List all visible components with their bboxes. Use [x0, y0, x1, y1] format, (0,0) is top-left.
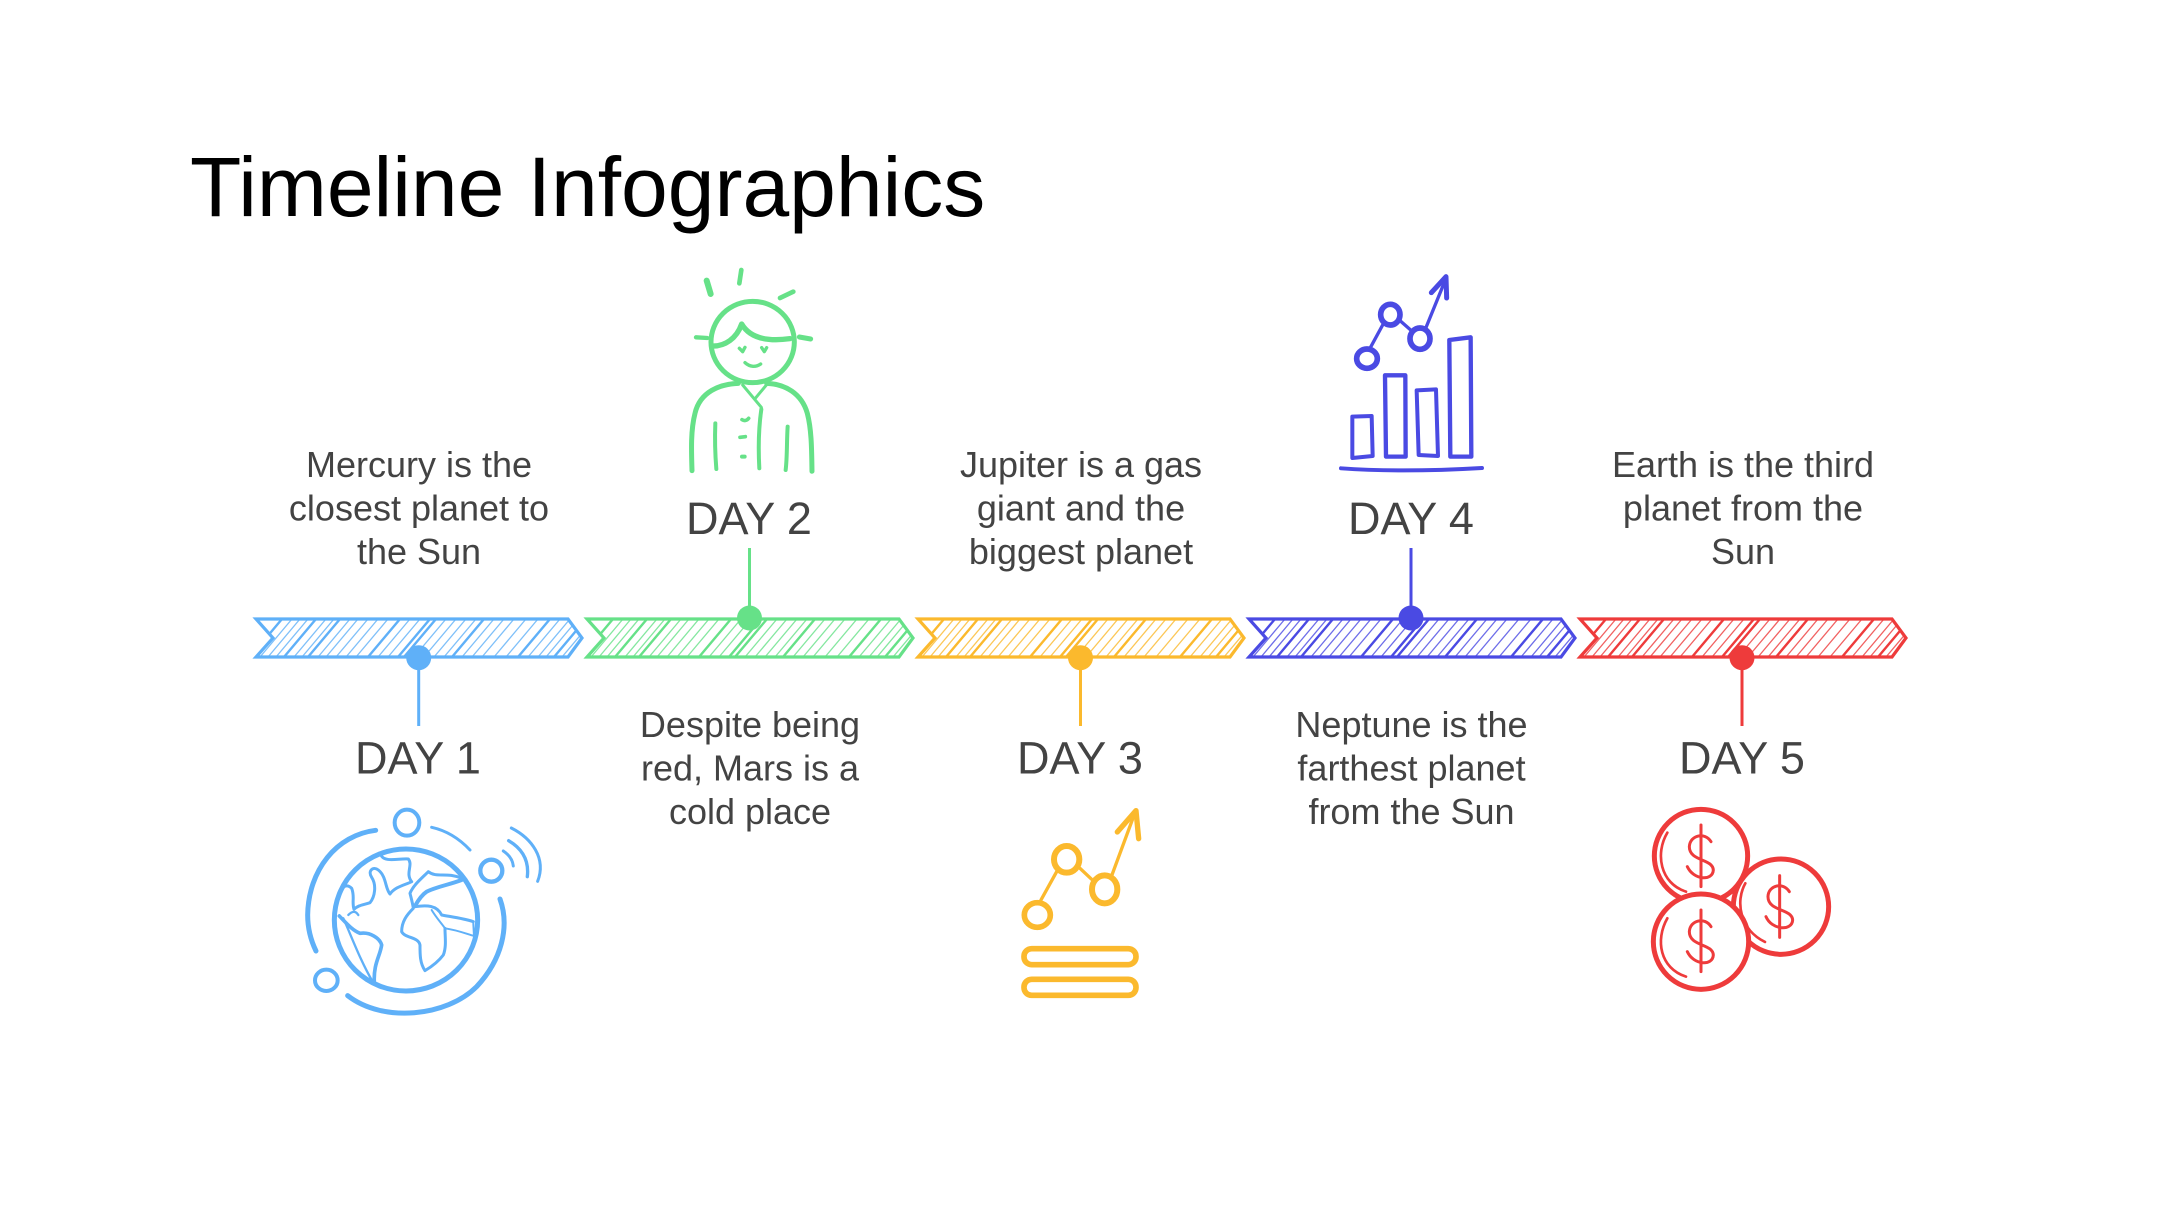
description: day 5: Earth is the third — [1612, 444, 1874, 485]
arrow: day 2 — [581, 619, 925, 657]
icon: globe with orbit — [308, 810, 540, 1013]
label: day 1: DAY 1 — [355, 732, 481, 784]
icon: three dollar coins — [1653, 809, 1829, 989]
description: day 5: planet from the — [1623, 488, 1863, 528]
label: day 4: DAY 4 — [1348, 493, 1474, 544]
description: day 4: Neptune is the — [1295, 704, 1528, 745]
description: day 1: closest planet to — [289, 488, 549, 528]
description: day 2: cold place — [669, 791, 831, 832]
connector: day 5 — [1730, 645, 1754, 726]
connector: day 3 — [1068, 645, 1093, 726]
connector: day 4 — [1398, 548, 1424, 630]
description: day 4: farthest planet — [1297, 748, 1526, 788]
arrow: day 4 — [1243, 619, 1587, 657]
timeline step: day 4 — [1243, 277, 1587, 832]
arrow: day 1 — [250, 619, 594, 657]
description: day 3: Jupiter is a gas — [960, 444, 1202, 485]
description: day 5: Sun — [1711, 531, 1775, 572]
label: day 2: DAY 2 — [686, 493, 812, 544]
timeline step: day 5 — [1574, 444, 1918, 989]
label: day 3: DAY 3 — [1017, 732, 1143, 784]
description: day 2: Despite being — [640, 704, 860, 745]
timeline step: day 2 — [581, 270, 925, 832]
label: day 5: DAY 5 — [1679, 732, 1805, 784]
description: day 3: giant and the — [977, 488, 1185, 528]
icon: growth chart with bars — [1024, 811, 1139, 995]
description: day 2: red, Mars is a — [641, 748, 860, 788]
arrow: day 5 — [1574, 619, 1918, 657]
description: day 1: the Sun — [357, 531, 481, 572]
connector: day 2 — [737, 548, 762, 630]
timeline step: day 3 — [912, 444, 1256, 995]
timeline step: day 1 — [250, 444, 594, 1013]
description: day 3: biggest planet — [969, 531, 1193, 572]
description: day 1: Mercury is the — [306, 444, 532, 485]
icon: person — [692, 270, 812, 471]
connector: day 1 — [406, 645, 431, 726]
description: day 4: from the Sun — [1308, 791, 1515, 832]
arrow: day 3 — [912, 619, 1256, 657]
icon: bar chart with trend line — [1341, 277, 1482, 470]
title: Timeline Infographics — [190, 140, 985, 234]
